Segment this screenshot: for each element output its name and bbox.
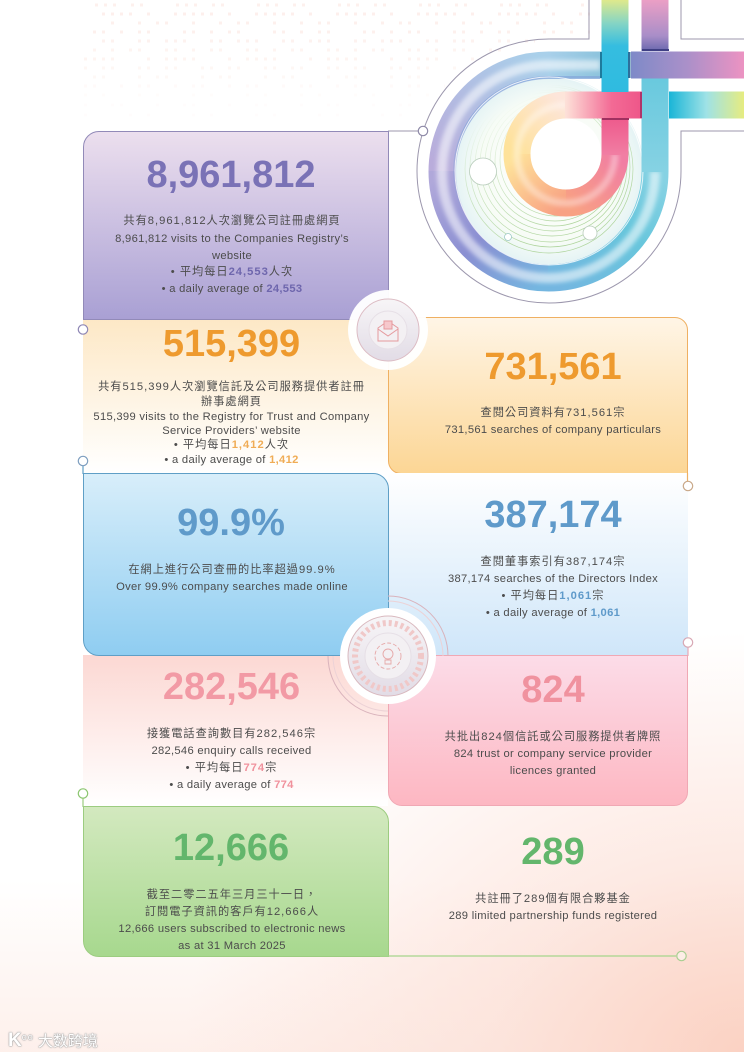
number: 731,561 xyxy=(484,346,622,388)
panel: left purple, Companies Registry visits: 8,961,812 visits to the Companies Registry’s xyxy=(115,233,349,245)
number: 282,546 xyxy=(163,666,300,708)
number: 12,666 xyxy=(173,827,289,869)
panel: right pink, licences: 824 trust or company service provider xyxy=(454,748,652,760)
description: 查閱董事索引有387,174宗 xyxy=(481,556,625,568)
description: 共批出824個信託或公司服務提供者牌照 xyxy=(445,731,661,743)
panel: left orange, trust registry visits: Service Providers’ website xyxy=(162,425,301,437)
panel: left purple, Companies Registry visits: • a daily average of 24,553 xyxy=(162,283,302,295)
number: 99.9% xyxy=(177,502,285,544)
watermark logo: Koo 大数跨境 xyxy=(8,1030,98,1051)
panel: left pink, enquiry calls: 282,546 enquiry calls received xyxy=(151,745,312,757)
panel: left purple, Companies Registry visits xyxy=(83,131,389,320)
panel: left purple, Companies Registry visits: website xyxy=(212,250,252,262)
panel: left green, electronic news xyxy=(83,806,389,957)
panel: right blue, directors index: • 平均每日1,061宗 xyxy=(502,590,604,602)
number: 289 xyxy=(521,831,585,873)
panel: left orange, trust registry visits: 辦事處網頁 xyxy=(201,396,262,408)
description: 查閱公司資料有731,561宗 xyxy=(481,407,625,419)
number: 515,399 xyxy=(163,323,300,365)
panel: right plain, limited partnership funds: 289 limited partnership funds registered xyxy=(449,910,657,922)
number: 387,174 xyxy=(484,494,622,536)
panel: left purple, Companies Registry visits: • 平均每日24,553人次 xyxy=(171,266,293,278)
description: 共註冊了289個有限合夥基金 xyxy=(475,893,631,905)
panel: left green, electronic news: as at 31 March 2025 xyxy=(178,940,286,952)
panel: left green, electronic news: 12,666 users subscribed to electronic news xyxy=(118,923,346,935)
number: 824 xyxy=(521,669,585,711)
panel: left orange, trust registry visits: 515,399 visits to the Registry for Trust and Company xyxy=(93,410,370,422)
outer thin frame xyxy=(388,0,744,303)
description: 共有515,399人次瀏覽信託及公司服務提供者註冊 xyxy=(98,381,365,393)
description: 接獲電話查詢數目有282,546宗 xyxy=(147,728,316,740)
panel: left pink, enquiry calls xyxy=(83,655,388,806)
panel: left blue, online searches xyxy=(83,473,389,656)
panel: left orange, trust registry visits xyxy=(83,319,388,473)
number: 8,961,812 xyxy=(146,154,316,196)
panel: left green, electronic news: 訂閱電子資訊的客戶有12,666人 xyxy=(145,906,319,918)
panel: left blue, online searches: Over 99.9% company searches made online xyxy=(116,581,348,593)
panel: right blue, directors index: 387,174 searches of the Directors Index xyxy=(448,573,658,585)
panel: right pink, licences: licences granted xyxy=(510,765,596,777)
description: 共有8,961,812人次瀏覽公司註冊處網頁 xyxy=(123,215,341,227)
description: 截至二零二五年三月三十一日， xyxy=(147,889,317,901)
panel: right blue, directors index: • a daily average of 1,061 xyxy=(486,607,620,619)
panel: right plain, limited partnership funds xyxy=(449,831,657,922)
panel: right orange, company particulars xyxy=(388,317,688,474)
panel: left pink, enquiry calls: • a daily average of 774 xyxy=(169,779,294,791)
panel: left orange, trust registry visits: • 平均每日1,412人次 xyxy=(174,439,289,451)
panel: right blue, directors index xyxy=(388,473,688,656)
panel: left orange, trust registry visits: • a daily average of 1,412 xyxy=(164,454,299,466)
description: 在網上進行公司查冊的比率超過99.9% xyxy=(128,564,336,576)
panel: left pink, enquiry calls: • 平均每日774宗 xyxy=(186,762,277,774)
panel: right orange, company particulars: 731,561 searches of company particulars xyxy=(445,424,661,436)
panel: right pink, licences xyxy=(388,655,688,806)
